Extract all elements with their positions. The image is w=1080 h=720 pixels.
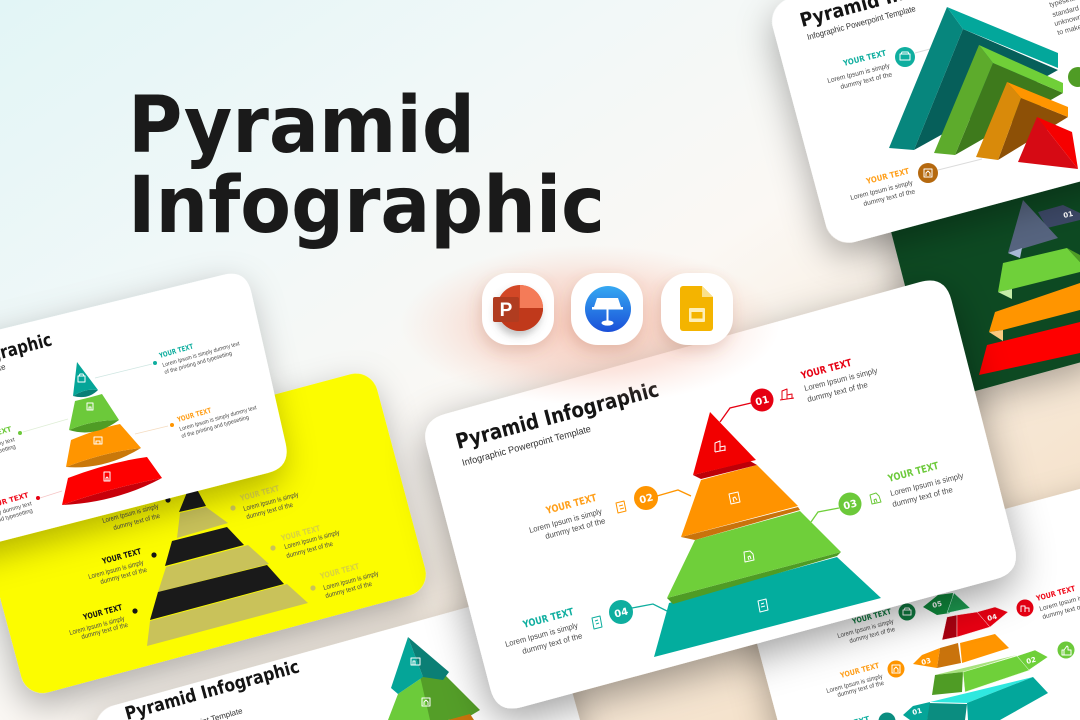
layer icons [715, 441, 768, 612]
label: 04: dummy text of the [521, 631, 584, 656]
right labels: YOUR TEXT [279, 524, 322, 543]
label: teal [822, 712, 896, 720]
label: orange [170, 405, 258, 440]
connector: 04 [632, 604, 667, 611]
label: red [1016, 584, 1080, 621]
segmented pyramid: teal [903, 677, 1048, 720]
right labels [230, 484, 380, 600]
left labels: Lorem Ipsum is simply [88, 559, 145, 581]
segmented pyramid: red [942, 607, 1008, 640]
label: 01 [750, 358, 878, 412]
right labels: Lorem Ipsum is simply [284, 529, 341, 551]
connector: 03 [811, 508, 839, 522]
right labels: YOUR TEXT [238, 484, 281, 503]
right labels: Lorem Ipsum is simply [323, 570, 380, 592]
icon: Google Slides [661, 273, 733, 345]
connector: 02 [657, 490, 691, 496]
label: dark green: Lorem Ipsum is simply [837, 618, 895, 640]
left labels: dummy text of the [100, 567, 148, 586]
red layer [693, 412, 757, 479]
label: 04: Lorem Ipsum is simply [504, 621, 579, 649]
label: orange: dummy text of the [863, 188, 916, 208]
label: dark green: dummy text of the [849, 626, 896, 645]
app icon glow [400, 245, 780, 405]
connector: 01 [720, 403, 751, 422]
label: teal: dummy text of the [840, 71, 893, 91]
label: green marker [1068, 67, 1080, 87]
label: 01: YOUR TEXT [799, 358, 853, 382]
corner text: standard [1052, 5, 1080, 19]
teal layer [654, 557, 881, 657]
left labels: dummy text of the [81, 622, 129, 641]
pyramid: red ribbon [979, 322, 1080, 375]
label: orange [850, 163, 938, 208]
label: teal [827, 47, 915, 91]
label: 02: dummy text of the [544, 516, 607, 541]
icon: PowerPoint [482, 273, 554, 345]
slide heading: Pyramid Infographic [453, 377, 661, 454]
orange layer [681, 465, 800, 540]
title: Pyramid [128, 81, 475, 171]
label: orange: Lorem Ipsum is simply [826, 673, 884, 695]
label: orange: YOUR TEXT [838, 661, 881, 680]
label: 03 [838, 461, 964, 516]
right labels: Lorem Ipsum is simply [243, 491, 300, 513]
pyramid: slate tip [1008, 200, 1080, 258]
label: 03: 03 [842, 498, 858, 512]
green layer [69, 394, 119, 432]
right labels: dummy text of the [325, 581, 373, 600]
right labels: dummy text of the [246, 502, 294, 521]
label: green [0, 425, 22, 471]
label: orange: dummy text of the [837, 680, 885, 699]
green and teal pyramid [388, 637, 480, 720]
left labels [69, 497, 171, 641]
panel: yellow slide [0, 369, 431, 698]
label: 03: YOUR TEXT [886, 461, 940, 485]
segmented pyramid: teal: 01 [911, 707, 923, 717]
left labels: Lorem Ipsum is simply [102, 503, 160, 525]
label: orange: YOUR TEXT [864, 166, 911, 186]
slide subtitle: Infographic Powerpoint Template [461, 424, 592, 469]
icon: PowerPoint: P [500, 300, 513, 321]
label: orange: Lorem Ipsum is simply [850, 180, 914, 202]
label: 03: dummy text of the [891, 485, 954, 509]
title [128, 81, 605, 251]
segmented pyramid: green: 02 [1025, 656, 1037, 666]
segmented pyramid: orange [913, 634, 1009, 668]
segmented pyramid: dark green tip [923, 593, 970, 615]
label: teal [153, 341, 241, 376]
label: dark green: YOUR TEXT [850, 607, 893, 626]
right labels: YOUR TEXT [318, 562, 361, 581]
red layer [62, 457, 162, 505]
green layer [667, 511, 841, 604]
orange layer [66, 424, 141, 467]
pyramid: orange ribbon [989, 283, 1080, 341]
cone pyramid [62, 362, 162, 505]
label: orange: YOUR TEXT [176, 407, 212, 424]
title: Infographic [128, 161, 605, 251]
segmented pyramid: green [932, 650, 1048, 695]
panel: main slide [425, 280, 1016, 709]
label: 01: dummy text of the [806, 380, 869, 404]
right labels: dummy text of the [286, 541, 334, 560]
connector lines [915, 49, 982, 170]
label: teal: Lorem Ipsum is simply [827, 63, 891, 85]
chevron pyramid [889, 7, 1078, 169]
panel: top left slide [0, 274, 287, 557]
teal chevron [889, 7, 1058, 150]
label: 02: Lorem Ipsum is simply [528, 507, 603, 535]
segmented pyramid: red: 04 [986, 613, 998, 623]
label: teal: of the printing and typesetting [164, 351, 233, 376]
label: orange [826, 660, 904, 699]
panel: bottom left slide [90, 586, 623, 720]
label: 04: YOUR TEXT [521, 607, 575, 631]
label: teal: YOUR TEXT [841, 48, 888, 68]
slide subtitle: Infographic Powerpoint Template [806, 3, 917, 42]
label: 02: 02 [638, 492, 654, 506]
pyramid: slate tip: 01 [1063, 210, 1074, 220]
left labels: dummy text of the [113, 513, 161, 532]
label: 03: Lorem Ipsum is simply [889, 471, 964, 498]
green chevron [934, 45, 1063, 155]
segmented pyramid: dark green tip: 05 [931, 600, 943, 610]
label: 01: Lorem Ipsum is simply [803, 366, 878, 393]
label: 02 [528, 486, 658, 541]
red tip [1018, 117, 1078, 169]
label: 02: YOUR TEXT [544, 493, 598, 517]
label: 04 [504, 600, 633, 656]
label: red [0, 491, 40, 535]
panel: bottom right slide [740, 451, 1080, 720]
segmented pyramid: orange: 03 [920, 657, 932, 667]
label: dark green [837, 604, 916, 645]
teal tip [73, 362, 98, 397]
orange chevron [976, 82, 1068, 160]
panel: top right slide [767, 0, 1080, 248]
left labels: Lorem Ipsum is simply [69, 615, 126, 637]
icon: Keynote [571, 273, 643, 345]
main pyramid [654, 412, 881, 657]
left labels: YOUR TEXT [81, 603, 124, 622]
label: 04: 04 [613, 606, 629, 620]
label: teal: Lorem Ipsum is simply dummy text [162, 341, 241, 369]
label: green [1058, 642, 1074, 658]
pyramid: green ribbon [998, 248, 1080, 299]
label: teal: YOUR TEXT [158, 343, 194, 360]
label: 01: 01 [754, 394, 770, 408]
corner text [1049, 0, 1080, 37]
striped pyramid [147, 480, 308, 646]
left labels: YOUR TEXT [100, 547, 143, 566]
label: orange: of the printing and typesetting [181, 415, 250, 440]
label: orange: Lorem Ipsum is simply dummy text [179, 405, 258, 433]
panel: dark green slide [870, 90, 1080, 402]
connector lines [23, 364, 168, 498]
